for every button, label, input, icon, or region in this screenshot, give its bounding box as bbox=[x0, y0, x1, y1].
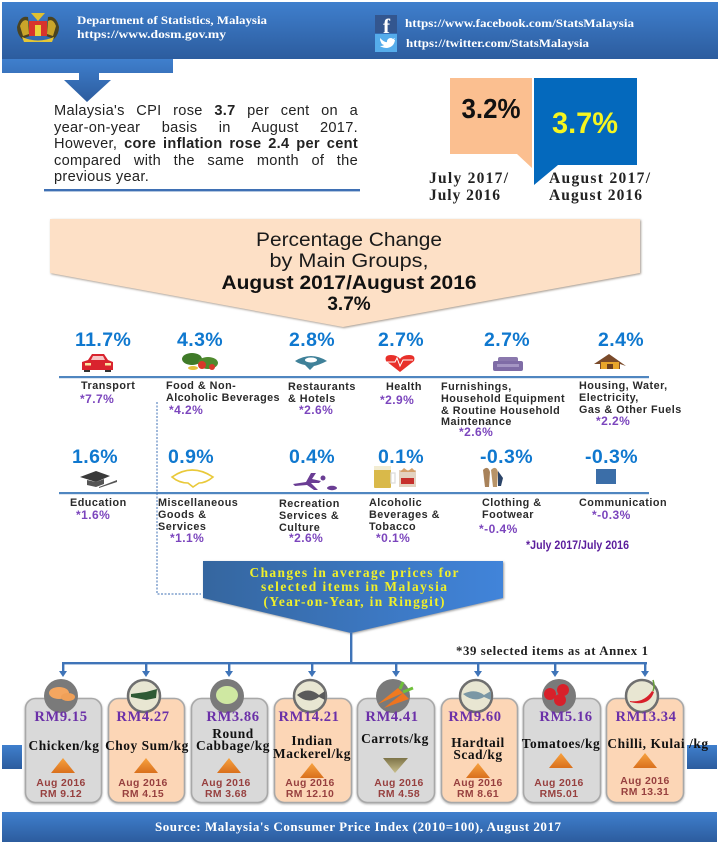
label: furnishings: Household Equipment bbox=[441, 393, 565, 405]
card: chilli kulai: RM13.34 bbox=[616, 709, 677, 725]
row 2 percentages: 0.4% bbox=[289, 446, 335, 468]
up arrow bbox=[134, 758, 158, 773]
label: transport bbox=[80, 380, 135, 406]
label: housing: *2.2% bbox=[596, 414, 630, 428]
label: furnishings bbox=[441, 381, 565, 439]
up arrow bbox=[300, 763, 324, 778]
label: clothing bbox=[479, 497, 542, 536]
icon: twitter bbox=[375, 34, 397, 52]
banner: percentage change: 3.7% bbox=[327, 294, 371, 315]
connector tree with arrows bbox=[59, 633, 649, 677]
paragraph: CPI summary bbox=[54, 103, 358, 185]
paragraph: CPI summary: year-on-year basis in August 2017. bbox=[54, 120, 358, 136]
icon: restaurant bbox=[295, 356, 327, 370]
label: housing: Housing, Water, bbox=[579, 380, 668, 392]
label: July period bbox=[429, 170, 509, 204]
icon: facebook: f bbox=[383, 14, 391, 38]
label: August period: August 2017/ bbox=[549, 170, 651, 187]
label: housing: Gas & Other Fuels bbox=[579, 404, 682, 416]
icon: shoes bbox=[483, 468, 503, 487]
card: hardtail scad: RM9.60 bbox=[448, 709, 502, 725]
card: choy sum bbox=[105, 680, 189, 802]
icon: chilli bbox=[626, 680, 658, 712]
up arrow bbox=[549, 753, 573, 768]
icon: mackerel bbox=[294, 680, 326, 712]
card: indian mackerel bbox=[273, 680, 352, 802]
card: chicken: Chicken/kg bbox=[29, 738, 99, 753]
row 1 percentages: 2.8% bbox=[289, 329, 335, 351]
footer source band bbox=[2, 812, 717, 842]
label: alcoholic: *0.1% bbox=[376, 531, 410, 545]
paragraph: CPI summary: Malaysia's CPI rose 3.7 per cent on a bbox=[54, 103, 358, 119]
label: recreation: *2.6% bbox=[289, 531, 323, 545]
callout: August 3.7% bbox=[534, 78, 637, 185]
rule row 2 bbox=[59, 492, 649, 494]
twitter link: https://twitter.com/StatsMalaysia bbox=[406, 38, 589, 50]
icon: chicken bbox=[44, 679, 78, 713]
banner: selected item prices: selected items in Malaysia bbox=[261, 579, 447, 594]
label: miscellaneous: Goods & bbox=[158, 509, 206, 521]
label: furnishings: Maintenance bbox=[441, 416, 512, 428]
card: tomatoes: RM5.01 bbox=[540, 789, 578, 800]
row 2 percentages: 0.9% bbox=[168, 446, 214, 468]
up arrow bbox=[466, 763, 490, 778]
label: communication: *-0.3% bbox=[592, 508, 631, 522]
card: carrots: Carrots/kg bbox=[361, 731, 429, 746]
icon: heart bbox=[386, 355, 414, 372]
footnote: July comparison: *July 2017/July 2016 bbox=[526, 540, 629, 552]
icon: necklace bbox=[172, 470, 213, 487]
card: indian mackerel: RM14.21 bbox=[278, 709, 340, 725]
up arrow bbox=[51, 758, 75, 773]
label: recreation: Services & bbox=[279, 510, 339, 522]
row 2 percentages: 0.1% bbox=[378, 446, 424, 468]
label: communication bbox=[579, 497, 667, 522]
row 1 percentages: 2.7% bbox=[484, 329, 530, 351]
up arrow bbox=[217, 758, 241, 773]
label: communication: Communication bbox=[579, 497, 667, 509]
icon: beer and cigarettes bbox=[374, 466, 416, 488]
row 1 labels bbox=[80, 380, 682, 439]
label: clothing: *-0.4% bbox=[479, 522, 518, 536]
card: hardtail scad bbox=[442, 680, 518, 802]
label: clothing: Footwear bbox=[482, 509, 534, 521]
label: transport: *7.7% bbox=[80, 392, 114, 406]
label: July period: July 2017/ bbox=[429, 170, 509, 187]
label: health: *2.9% bbox=[380, 393, 414, 407]
card: indian mackerel: RM 12.10 bbox=[286, 789, 334, 800]
row 1 percentages bbox=[75, 329, 644, 351]
label: miscellaneous: Services bbox=[158, 521, 206, 533]
label: furnishings: & Routine Household bbox=[441, 405, 560, 417]
banner: percentage change bbox=[50, 219, 640, 327]
card: round cabbage bbox=[192, 679, 270, 802]
row 1 percentages: 2.4% bbox=[598, 329, 644, 351]
row 2 percentages: 1.6% bbox=[72, 446, 118, 468]
label: housing: Electricity, bbox=[579, 392, 639, 404]
label: alcoholic: Beverages & bbox=[369, 509, 440, 521]
label: alcoholic bbox=[369, 497, 440, 545]
rule under paragraph bbox=[44, 189, 360, 191]
label: August period: August 2016 bbox=[549, 187, 642, 204]
card: choy sum: RM 4.15 bbox=[122, 789, 164, 800]
label: education bbox=[70, 497, 127, 522]
down arrow bbox=[383, 758, 408, 773]
banner: percentage change: August 2017/August 2016 bbox=[222, 272, 477, 294]
card: carrots: Aug 2016 bbox=[374, 778, 424, 789]
card: hardtail scad: Scad/kg bbox=[453, 747, 503, 762]
banner: percentage change: by Main Groups, bbox=[270, 251, 428, 272]
header band bbox=[2, 2, 718, 59]
label: restaurants: Restaurants bbox=[288, 381, 356, 393]
label: miscellaneous: Miscellaneous bbox=[158, 497, 238, 509]
arrow tab from header bbox=[2, 59, 173, 102]
icon: recreation figure bbox=[293, 473, 337, 490]
department name: Department of Statistics, Malaysia bbox=[77, 13, 267, 27]
card: tomatoes: Aug 2016 bbox=[534, 778, 584, 789]
callout: July 3.2% bbox=[450, 78, 532, 168]
card: choy sum: Choy Sum/kg bbox=[105, 738, 189, 753]
card: hardtail scad: Hardtail bbox=[451, 735, 505, 750]
card: round cabbage: Round bbox=[212, 726, 254, 741]
icon: facebook bbox=[375, 14, 397, 38]
row 2 percentages: -0.3% bbox=[480, 446, 533, 468]
icon: tomatoes bbox=[542, 679, 576, 713]
card: chilli kulai bbox=[606, 680, 709, 802]
label: clothing: Clothing & bbox=[482, 497, 542, 509]
label: restaurants: *2.6% bbox=[299, 403, 333, 417]
card: carrots bbox=[358, 679, 434, 802]
side tabs behind cards bbox=[2, 745, 717, 769]
card: choy sum: Aug 2016 bbox=[118, 778, 168, 789]
department website: https://www.dosm.gov.my bbox=[77, 27, 226, 41]
label: recreation: Recreation bbox=[279, 498, 340, 510]
card: carrots: RM 4.58 bbox=[378, 789, 420, 800]
rule row 1 bbox=[59, 376, 649, 378]
banner: percentage change: Percentage Change bbox=[256, 230, 442, 251]
label: restaurants: & Hotels bbox=[288, 393, 336, 405]
card: chicken bbox=[26, 679, 102, 802]
row 1 percentages: 4.3% bbox=[177, 329, 223, 351]
label: food: Alcoholic Beverages bbox=[166, 392, 280, 404]
label: miscellaneous bbox=[158, 497, 238, 545]
label: food: *4.2% bbox=[169, 403, 203, 417]
label: food: Food & Non- bbox=[166, 380, 236, 392]
paragraph: CPI summary: However, core inflation rose 2.4 per cent bbox=[54, 136, 358, 152]
card: round cabbage: RM 3.68 bbox=[205, 789, 247, 800]
footer source band: Source: Malaysia's Consumer Price Index (2010=100), August 2017 bbox=[155, 819, 562, 834]
icon: house bbox=[594, 354, 626, 369]
row 2 percentages: -0.3% bbox=[585, 446, 638, 468]
row 2 labels bbox=[70, 497, 667, 545]
card: tomatoes bbox=[522, 679, 600, 802]
card: carrots: RM4.41 bbox=[365, 709, 419, 725]
card: choy sum: RM4.27 bbox=[116, 709, 170, 725]
card: chilli kulai: Aug 2016 bbox=[620, 776, 670, 787]
label: recreation: Culture bbox=[279, 522, 320, 534]
banner: selected item prices bbox=[203, 561, 503, 633]
card: tomatoes: RM5.16 bbox=[539, 709, 593, 725]
card: chilli kulai: Chilli, Kulai /kg bbox=[607, 736, 709, 751]
label: health: Health bbox=[386, 381, 422, 393]
paragraph: CPI summary: compared with the same month of the bbox=[54, 153, 358, 169]
label: recreation bbox=[279, 498, 340, 545]
label: August period bbox=[549, 170, 651, 204]
row 1 percentages: 2.7% bbox=[378, 329, 424, 351]
label: alcoholic: Tobacco bbox=[369, 521, 416, 533]
label: housing bbox=[579, 380, 682, 428]
card: chicken: Aug 2016 bbox=[36, 778, 86, 789]
card: hardtail scad: Aug 2016 bbox=[453, 778, 503, 789]
banner: selected item prices: Changes in average prices for bbox=[250, 565, 459, 580]
row 2 percentages bbox=[72, 446, 638, 468]
label: furnishings: Furnishings, bbox=[441, 381, 512, 393]
icon: food bbox=[182, 353, 218, 370]
label: health bbox=[380, 381, 422, 407]
callout: August 3.7%: 3.7% bbox=[552, 107, 618, 140]
callout: July 3.2%: 3.2% bbox=[462, 93, 521, 124]
icon: graduation cap bbox=[80, 471, 117, 488]
icon: choy sum bbox=[128, 680, 160, 712]
label: July period: July 2016 bbox=[429, 187, 500, 204]
label: education: Education bbox=[70, 497, 127, 509]
label: miscellaneous: *1.1% bbox=[170, 531, 204, 545]
label: alcoholic: Alcoholic bbox=[369, 497, 422, 509]
label: food bbox=[166, 380, 280, 417]
label: transport: Transport bbox=[81, 380, 135, 392]
label: restaurants bbox=[288, 381, 356, 417]
icon: carrots bbox=[376, 679, 413, 713]
note: selected items: *39 selected items as at Annex 1 bbox=[456, 644, 648, 658]
card: chilli kulai: RM 13.31 bbox=[621, 787, 669, 798]
paragraph: CPI summary: previous year. bbox=[54, 169, 149, 185]
up arrow bbox=[633, 753, 657, 768]
icon: hardtail scad bbox=[460, 680, 492, 712]
card: round cabbage: RM3.86 bbox=[206, 709, 260, 725]
dotted connector bbox=[157, 402, 201, 594]
card: round cabbage: Cabbage/kg bbox=[196, 738, 270, 753]
card: tomatoes: Tomatoes/kg bbox=[522, 736, 600, 751]
icon: car bbox=[82, 354, 113, 372]
facebook link: https://www.facebook.com/StatsMalaysia bbox=[405, 18, 634, 30]
icon: communication square bbox=[596, 469, 616, 484]
card: indian mackerel: Indian bbox=[291, 733, 333, 748]
icon: sofa bbox=[493, 357, 523, 371]
card: indian mackerel: Mackerel/kg bbox=[273, 746, 351, 761]
card: indian mackerel: Aug 2016 bbox=[285, 778, 335, 789]
label: education: *1.6% bbox=[76, 508, 110, 522]
icon: coat of arms bbox=[17, 13, 59, 42]
card: hardtail scad: RM 8.61 bbox=[457, 789, 499, 800]
card: chicken: RM 9.12 bbox=[40, 789, 82, 800]
card: round cabbage: Aug 2016 bbox=[201, 778, 251, 789]
card: chicken: RM9.15 bbox=[34, 709, 88, 725]
label: furnishings: *2.6% bbox=[459, 425, 493, 439]
banner: selected item prices: (Year-on-Year, in Ringgit) bbox=[264, 594, 444, 609]
row 1 percentages: 11.7% bbox=[75, 329, 131, 351]
icon: cabbage bbox=[210, 679, 244, 713]
